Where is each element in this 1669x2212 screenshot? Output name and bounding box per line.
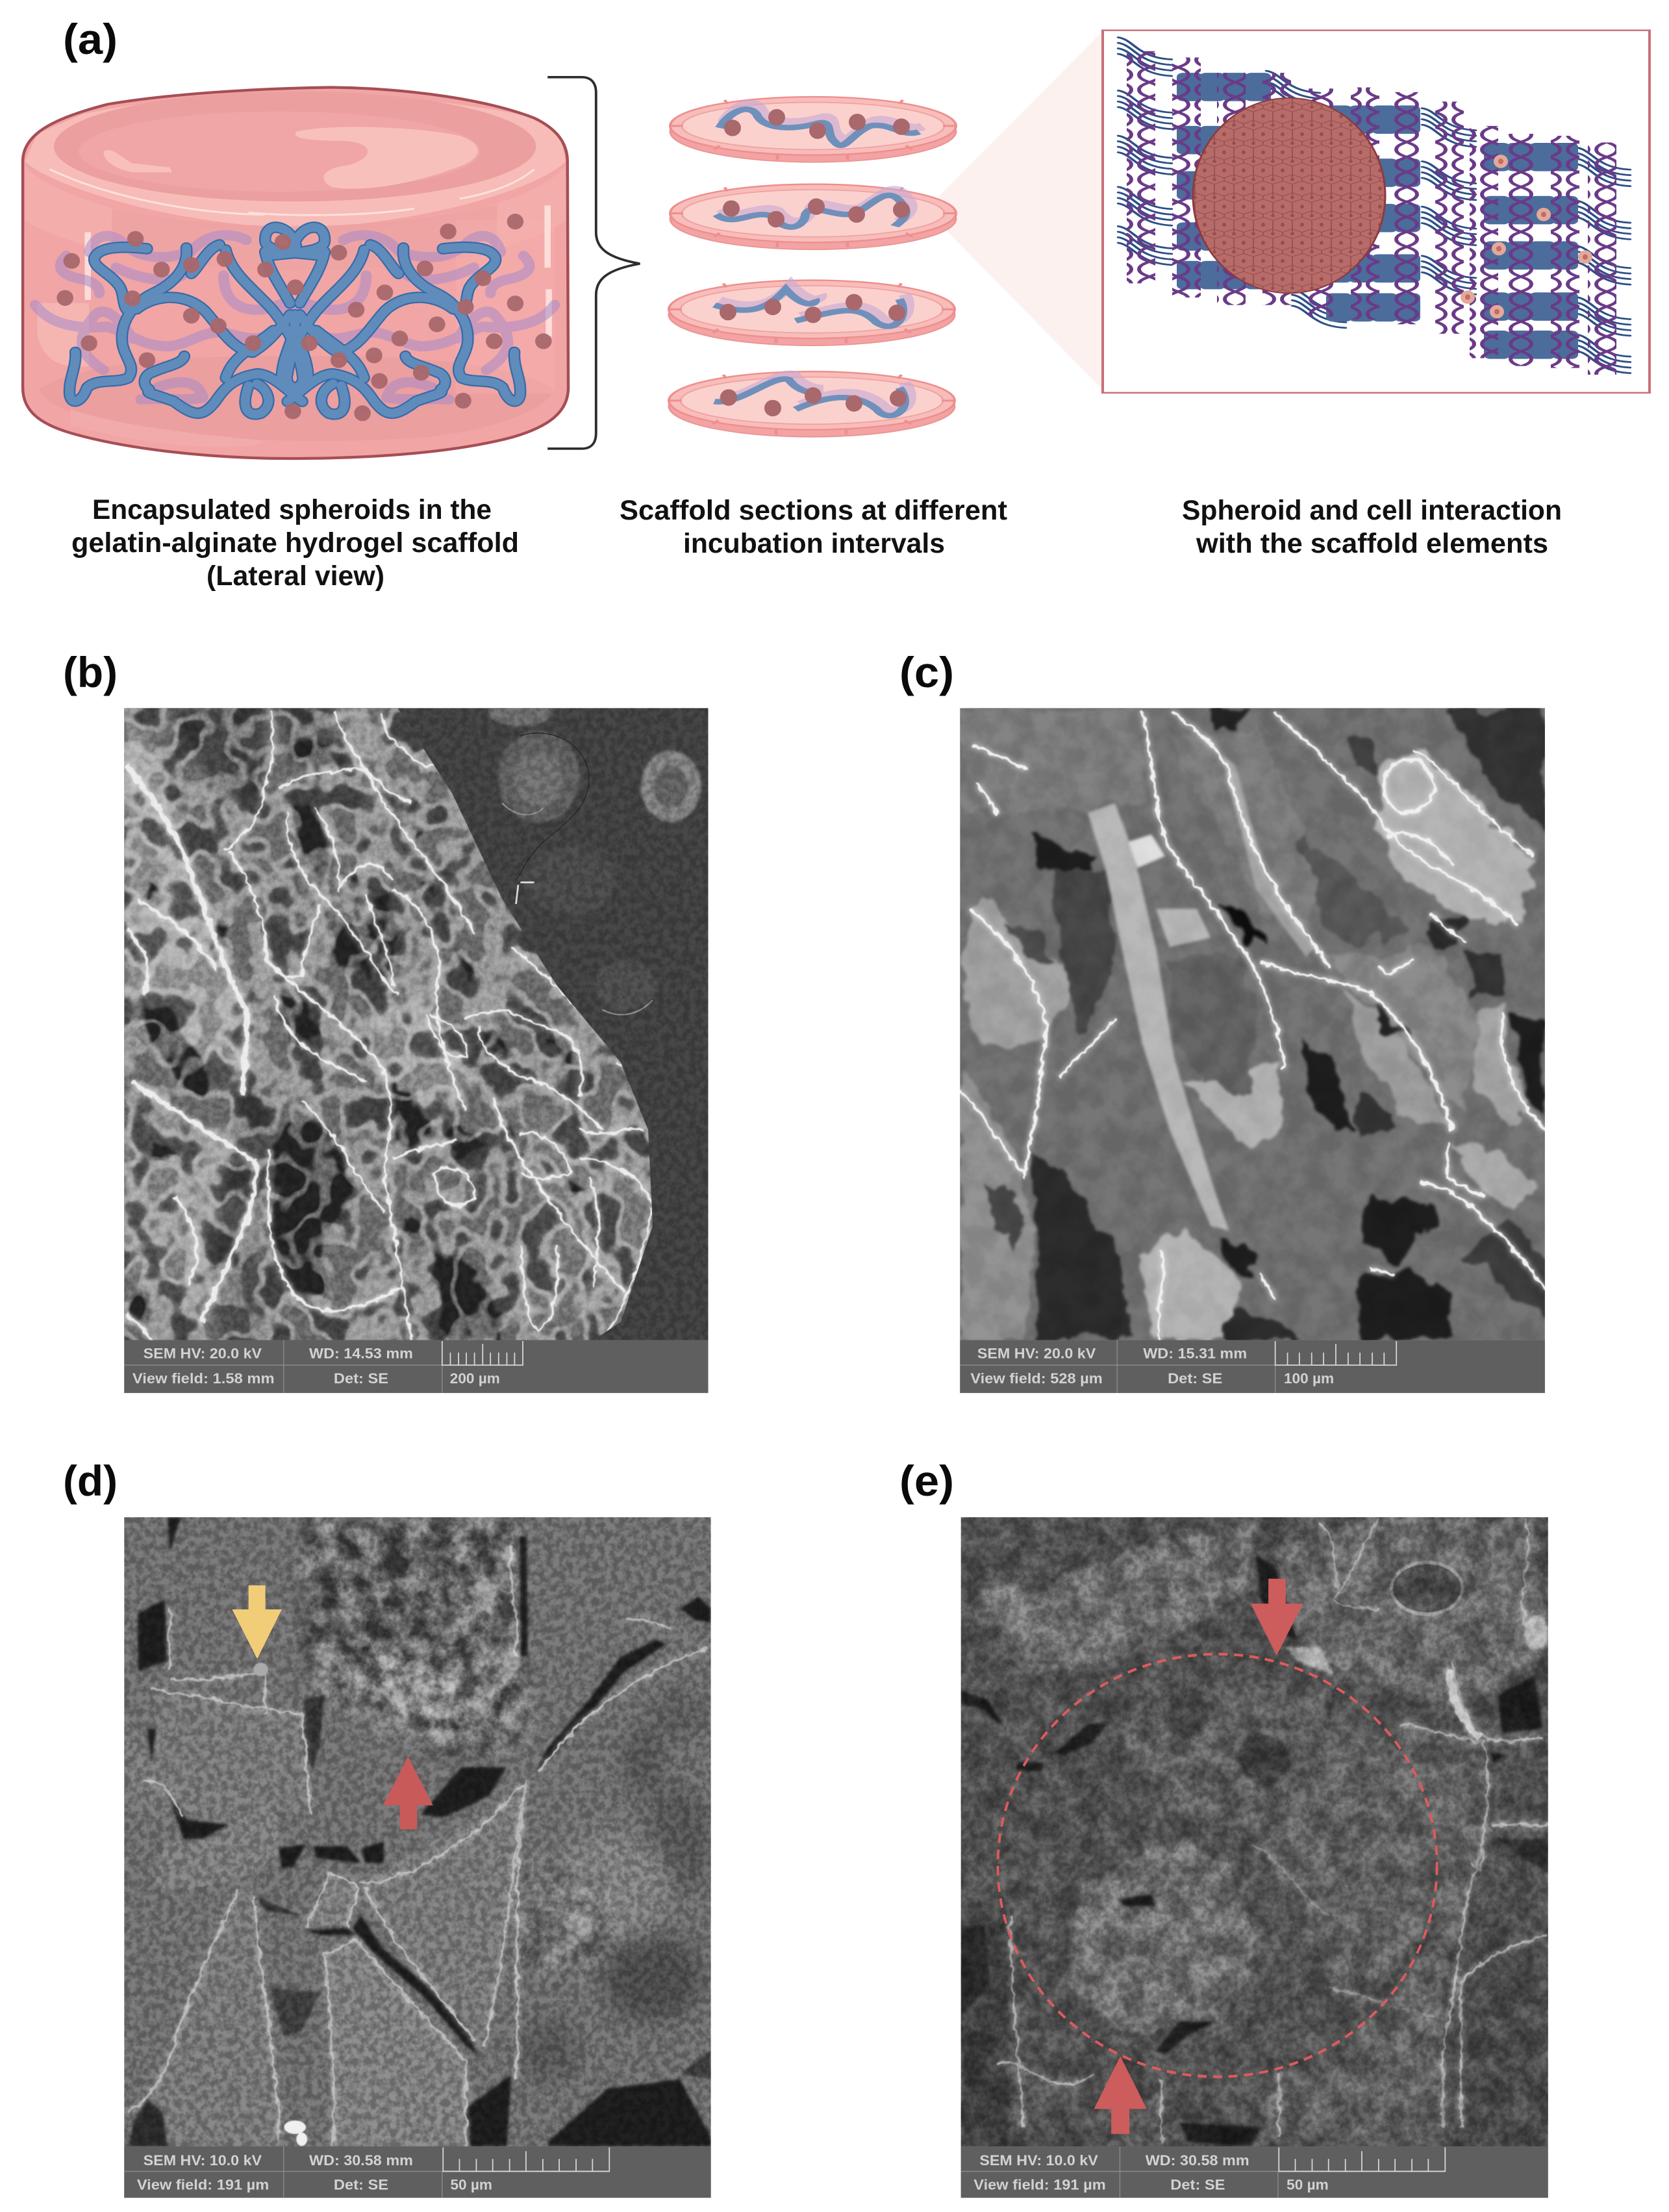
- info bar e: [961, 2146, 1548, 2198]
- info bar c: SEM HV: 20.0 kV: [977, 1345, 1096, 1362]
- info bar e: WD: 30.58 mm: [1146, 2152, 1249, 2168]
- panel label (b): (b): [63, 648, 118, 696]
- cauliflower aggregates: [124, 1517, 711, 2146]
- light folds: [996, 1517, 1548, 2142]
- panel label (a): (a): [63, 15, 118, 63]
- bright ridges: [127, 712, 653, 1340]
- info bar b: WD: 14.53 mm: [309, 1345, 413, 1362]
- flaps: [151, 1695, 520, 2146]
- light strands: [1088, 755, 1315, 1231]
- arrow: red up: [383, 1756, 433, 1829]
- info bar b: View field: 1.58 mm: [132, 1370, 275, 1387]
- info bar c: Det: SE: [1168, 1370, 1222, 1387]
- oval pit: [1392, 1563, 1462, 1615]
- tonal regions: [961, 1517, 1548, 2146]
- flap edges: [129, 1546, 707, 2146]
- info bar b: [124, 1340, 709, 1393]
- cracks and voids: [129, 1517, 711, 2146]
- spheroids: [56, 214, 552, 421]
- panel a: inset scaffold and spheroid: [1103, 31, 1650, 393]
- spheroid: [1193, 98, 1385, 293]
- panel a: hydrogel cylinder illustration: [23, 88, 568, 459]
- info bar e: 50 µm: [1286, 2176, 1329, 2193]
- info bar d: Det: SE: [334, 2176, 388, 2193]
- single cells: [1461, 155, 1592, 318]
- caption: scaffold sections: [620, 495, 1007, 559]
- caption: encapsulated spheroids: [71, 494, 519, 592]
- info bar d: SEM HV: 10.0 kV: [144, 2152, 262, 2168]
- caption: scaffold sections: Scaffold sections at different: [620, 495, 1007, 526]
- smooth substrate details: [488, 698, 701, 1010]
- curly brace: [547, 77, 640, 449]
- blue alginate fibres: [69, 227, 520, 414]
- panel a: scaffold section discs: [669, 97, 956, 437]
- caption: encapsulated spheroids: (Lateral view): [207, 560, 384, 592]
- dashed spheroid outline: [998, 1654, 1437, 2077]
- info bar c: 100 µm: [1284, 1370, 1334, 1387]
- purple background fibres: [35, 235, 555, 399]
- caption: scaffold sections: incubation intervals: [683, 528, 945, 559]
- disc 2: [670, 184, 956, 249]
- panel d: SEM micrograph: [119, 1517, 712, 2198]
- info bar c: [960, 1340, 1545, 1393]
- info bar c: WD: 15.31 mm: [1143, 1345, 1247, 1362]
- scaffold foam body: [124, 708, 653, 1340]
- info bar d: 50 µm: [450, 2176, 492, 2193]
- info bar e: SEM HV: 10.0 kV: [979, 2152, 1098, 2168]
- info bar b: 200 µm: [450, 1370, 500, 1387]
- info bar e: View field: 191 µm: [973, 2176, 1106, 2193]
- zoom cone: [938, 31, 1103, 390]
- info bar d: WD: 30.58 mm: [309, 2152, 413, 2168]
- arrow: yellow down: [232, 1585, 282, 1659]
- info bar b: SEM HV: 20.0 kV: [144, 1345, 262, 1362]
- info bar d: [124, 2146, 711, 2198]
- caption: encapsulated spheroids: Encapsulated spheroids in the: [92, 494, 492, 525]
- panel label (e): (e): [899, 1457, 954, 1505]
- web texture: [124, 708, 709, 1340]
- panel b: SEM micrograph: [124, 698, 709, 1393]
- panel c: SEM micrograph: [960, 708, 1545, 1393]
- caption: spheroid and cell interaction: [1182, 495, 1562, 559]
- purple helices: [1127, 51, 1616, 375]
- disc 4: [669, 371, 955, 437]
- info bar c: View field: 528 µm: [970, 1370, 1103, 1387]
- disc 3: [669, 280, 955, 346]
- caption: spheroid and cell interaction: Spheroid and cell interaction: [1182, 495, 1562, 526]
- disc 1: [670, 97, 956, 162]
- panel label (d): (d): [63, 1457, 118, 1505]
- caption: spheroid and cell interaction: with the scaffold elements: [1196, 528, 1548, 559]
- info bar e: Det: SE: [1170, 2176, 1225, 2193]
- dark gaps: [961, 1555, 1548, 2146]
- tonal blotches: [119, 1527, 712, 2084]
- panel label (c): (c): [899, 648, 954, 696]
- arrow: red down: [1251, 1579, 1303, 1655]
- blue blocks: [1177, 73, 1578, 359]
- info bar b: Det: SE: [334, 1370, 388, 1387]
- grain: [124, 708, 709, 1340]
- arrow: red up: [1094, 2056, 1147, 2134]
- panel e: SEM micrograph: [961, 1517, 1548, 2198]
- dark voids: [987, 708, 1545, 1340]
- bright debris: [253, 1663, 307, 2146]
- random pores: [124, 708, 709, 1340]
- pores: [127, 740, 589, 1340]
- caption: encapsulated spheroids: gelatin-alginate hydrogel scaffold: [71, 527, 519, 559]
- membrane tones: [960, 708, 1534, 1340]
- blue strands: [1118, 38, 1630, 373]
- info bar d: View field: 191 µm: [137, 2176, 269, 2193]
